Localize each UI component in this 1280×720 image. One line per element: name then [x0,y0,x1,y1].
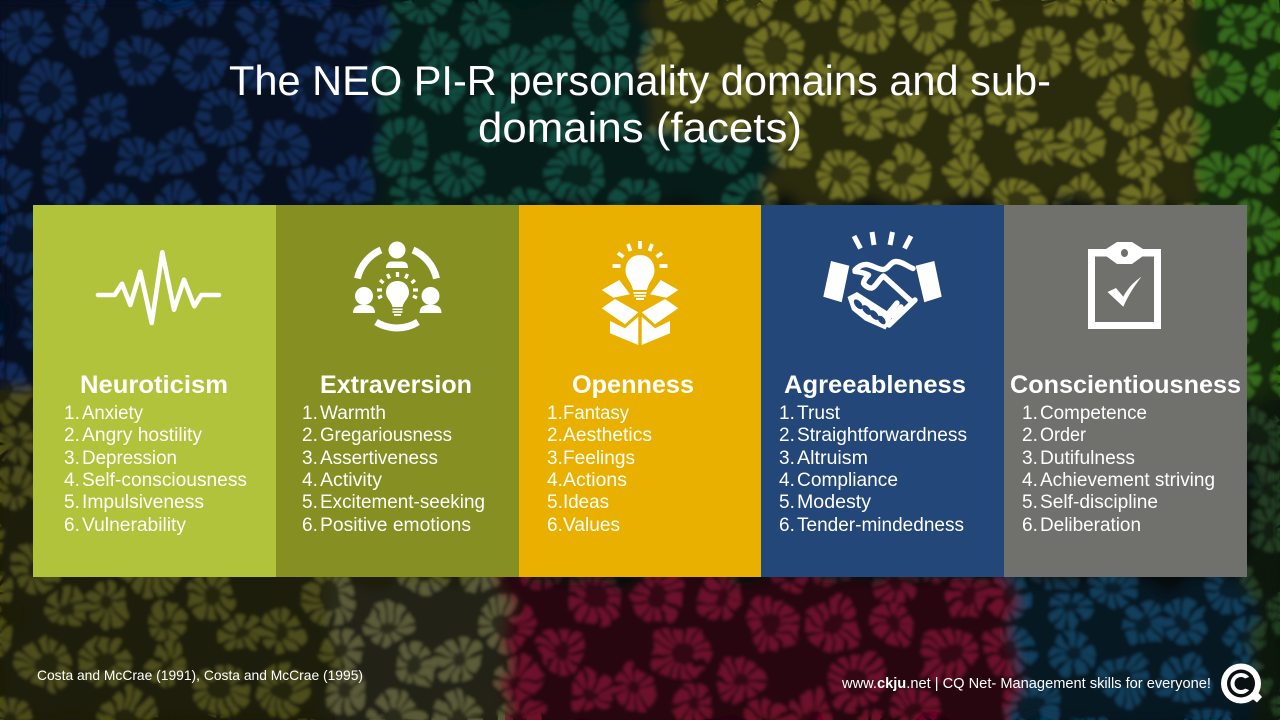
list: Neuroticism facets: 2. [64,425,80,446]
list: Conscientiousness facets [1022,403,1215,536]
panel: Conscientiousness [1004,205,1247,577]
panel: Openness [519,205,761,577]
icon: people around a light bulb [353,242,442,328]
title [229,57,1051,151]
list: Agreeableness facets: Altruism [797,448,868,469]
heading: Extraversion: Extraversion [320,371,472,399]
list: Neuroticism facets: Impulsiveness [82,492,204,513]
list: Neuroticism facets: 3. [64,448,80,469]
list: Openness facets: 4. [547,470,563,491]
list: Agreeableness facets: 1. [779,403,795,424]
list: Agreeableness facets: Compliance [797,470,898,491]
list: Openness facets: 3. [547,448,563,469]
list: Extraversion facets: Activity [320,470,382,491]
list: Conscientiousness facets: 3. [1022,448,1038,469]
list: Agreeableness facets: Modesty [797,492,872,513]
list: Openness facets: 6. [547,515,563,536]
list: Neuroticism facets: Self-consciousness [82,470,247,491]
panel: Neuroticism [33,205,276,577]
list: Conscientiousness facets: Order [1040,425,1087,446]
list: Openness facets: Feelings [563,448,635,469]
icon: light bulb rising from a box [602,241,678,345]
list: Neuroticism facets: Anxiety [82,403,143,424]
list: Extraversion facets [302,403,485,536]
list: Agreeableness facets: 2. [779,425,795,446]
list: Conscientiousness facets: Competence [1040,403,1147,424]
list: Neuroticism facets: 4. [64,470,80,491]
list: Agreeableness facets [779,403,967,536]
list: Agreeableness facets: 6. [779,515,795,536]
list: Agreeableness facets: Trust [797,403,841,424]
list: Extraversion facets: Excitement-seeking [320,492,485,513]
list: Neuroticism facets: 1. [64,403,80,424]
list: Agreeableness facets: Straightforwardness [797,425,967,446]
citation: Costa and McCrae (1991), Costa and McCrae (1995) [37,667,363,683]
list: Openness facets [547,403,652,536]
website credit: www.ckju.net | CQ Net- Management skills for everyone! [841,676,1211,692]
heading: Openness: Openness [572,371,694,399]
list: Agreeableness facets: Tender-mindedness [797,515,964,536]
panel: Agreeableness [761,205,1004,577]
title: domains (facets) [478,104,802,151]
list: Neuroticism facets: Angry hostility [82,425,202,446]
list: Extraversion facets: 2. [302,425,318,446]
list: Openness facets: Values [563,515,620,536]
logo: CQ [1221,664,1262,704]
list: Agreeableness facets: 4. [779,470,795,491]
list: Neuroticism facets: 5. [64,492,80,513]
list: Conscientiousness facets: 1. [1022,403,1038,424]
icon: clipboard with check mark [1088,242,1161,329]
list: Openness facets: Ideas [563,492,609,513]
list: Openness facets: Fantasy [563,403,629,424]
heading: Neuroticism: Neuroticism [80,371,228,399]
list: Extraversion facets: Gregariousness [320,425,452,446]
list: Conscientiousness facets: Dutifulness [1040,448,1135,469]
list: Conscientiousness facets: 2. [1022,425,1038,446]
icon: pulse line [98,252,219,323]
list: Extraversion facets: 5. [302,492,318,513]
list: Conscientiousness facets: Achievement striving [1040,470,1215,491]
title: The NEO PI-R personality domains and sub- [229,57,1051,104]
list: Openness facets: 1. [547,403,563,424]
list: Conscientiousness facets: 4. [1022,470,1038,491]
list: Neuroticism facets: Vulnerability [82,515,187,536]
list: Extraversion facets: 6. [302,515,318,536]
list: Extraversion facets: 4. [302,470,318,491]
list: Neuroticism facets: 6. [64,515,80,536]
list: Conscientiousness facets: Self-discipline [1040,492,1158,513]
list: Extraversion facets: Warmth [320,403,386,424]
list: Conscientiousness facets: 6. [1022,515,1038,536]
panel: Extraversion [276,205,519,577]
list: Openness facets: 2. [547,425,563,446]
list: Extraversion facets: Positive emotions [320,515,471,536]
list: Conscientiousness facets: 5. [1022,492,1038,513]
icon: handshake [823,232,942,330]
list: Neuroticism facets: Depression [82,448,177,469]
list: Extraversion facets: Assertiveness [320,448,438,469]
list: Conscientiousness facets: Deliberation [1040,515,1141,536]
list: Extraversion facets: 3. [302,448,318,469]
list: Extraversion facets: 1. [302,403,318,424]
list: Agreeableness facets: 3. [779,448,795,469]
list: Openness facets: Actions [563,470,627,491]
list: Neuroticism facets [64,403,247,536]
list: Openness facets: 5. [547,492,563,513]
heading: Conscientiousness: Conscientiousness [1010,371,1241,399]
heading: Agreeableness: Agreeableness [784,371,966,399]
list: Agreeableness facets: 5. [779,492,795,513]
list: Openness facets: Aesthetics [563,425,652,446]
